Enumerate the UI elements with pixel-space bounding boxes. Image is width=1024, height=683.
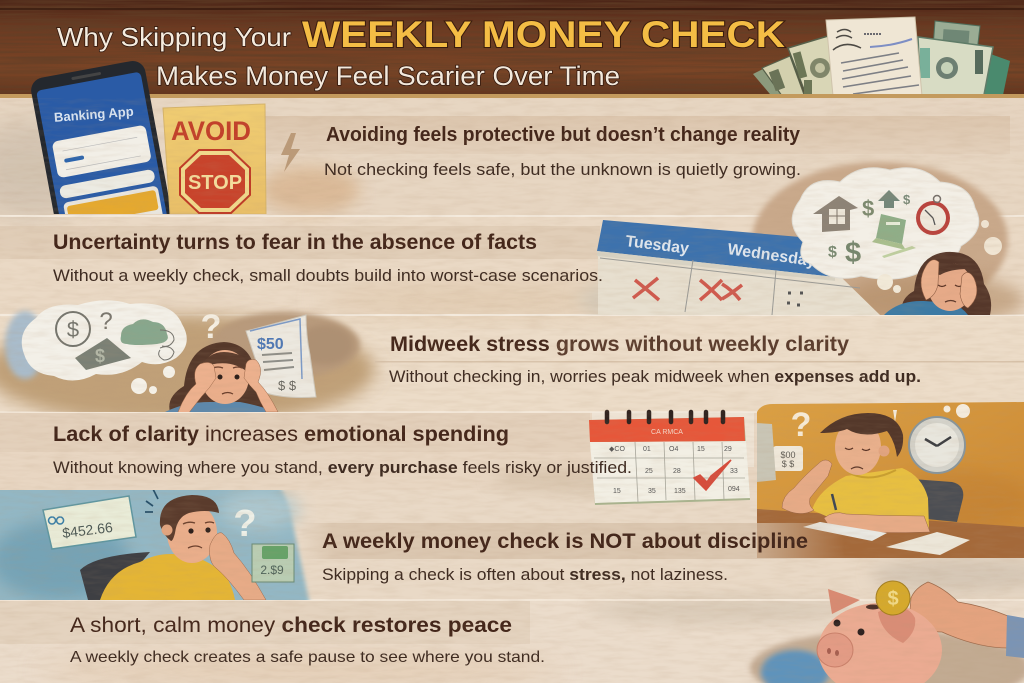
dollar coin: $ [67,317,79,342]
receipt: $50 [257,336,284,353]
pig ear right [878,607,915,643]
heading 6: A short, calm money check restores peace [70,614,512,637]
icon: dollar bills left [753,36,832,94]
receipt [246,315,316,398]
coin: $ [887,588,899,610]
panel 1: avoiding [265,116,1010,179]
illustration: tan backdrop [580,162,1024,326]
icon: alarm clock [916,196,950,235]
receipt: $ $ [278,378,297,393]
heading band [300,523,845,559]
title highlight: WEEKLY MONEY CHECK [302,14,785,55]
dollar coin [56,312,90,346]
calendar: 29 [724,446,732,453]
worry lines [145,489,158,512]
calendar: 28 [673,468,681,475]
calendar [589,412,776,505]
raised arm [210,533,266,600]
body 6: A weekly check creates a safe pause to see where you stand. [70,649,545,666]
red x marks [633,278,742,300]
calendar: 25 [645,468,653,475]
hand [910,582,1008,648]
thought cloud: $ [828,244,837,261]
illustration: calendar strip: Wednesday [726,241,817,270]
heading band [0,226,600,259]
wall clock [909,417,965,473]
calendar: 01 [643,446,651,453]
question mark: ? [791,406,811,444]
calendar: O4 [669,446,678,453]
action card [64,186,163,214]
panel 4: emotional spending [0,402,1024,558]
thought cloud [22,300,187,394]
day labels: Tuesday [625,233,690,258]
woman worried [165,342,278,414]
icon: house [813,196,858,232]
sticky price note [773,446,803,471]
coin [876,581,910,615]
calendar: ◆CO [609,446,625,453]
heading band divider [375,361,1024,362]
question mark: ? [233,503,257,545]
heading band [0,601,530,644]
body 4: Without knowing where you stand, every purchase feels risky or justified. [53,458,632,477]
chair [80,552,150,600]
chair [918,480,964,522]
illustration: orange wall [757,402,1024,558]
arm right [824,513,930,533]
header wood banner [0,0,1024,98]
search pill [59,169,156,199]
heading 1: Avoiding feels protective but doesn’t change reality [326,124,801,146]
icon: arrow up [878,190,900,208]
panel 5: not about discipline [0,490,836,600]
pig ear left [828,589,860,614]
man worried [100,495,266,600]
illustration: calendar strip [597,220,880,315]
sticky price note: $ $ [782,459,794,469]
thought cloud: $ [845,237,861,269]
calendar: 33 [730,468,738,475]
calendar: 35 [648,488,656,495]
dollar signs: $ [862,196,874,221]
piggy bank with coin [817,581,1024,683]
illustration: backdrop [0,311,375,425]
money pile [252,544,294,582]
icon: paper note [826,17,922,96]
question mark in cloud: ? [99,308,113,335]
illustration: blue wall [0,490,312,600]
icon: lightning bolt [281,133,300,172]
sleeve [1006,615,1024,658]
notebook and paper [803,522,887,541]
icon: stop sign: STOP [188,172,242,194]
illustration: avoid stop note [163,104,266,214]
man thinking [782,413,930,533]
heading band [0,413,590,452]
money stack [75,338,131,370]
panel 2: uncertainty [0,162,1024,326]
balance card [43,496,136,549]
icon: dollar bills right [918,21,1010,100]
panel 6: calm check [0,581,1024,683]
panel 3: midweek stress [0,300,1024,412]
title line 2: Makes Money Feel Scarier Over Time [156,61,620,91]
money pile: 2.$9 [260,563,284,577]
thought cloud: $ [903,192,911,207]
heading 5: A weekly money check is NOT about discipline [322,530,808,553]
illustration: backdrop stains [750,630,1024,683]
money stack: $ [95,346,105,366]
body 3: Without checking in, worries peak midweek when expenses add up. [389,367,921,386]
calendar: 094 [728,486,740,493]
calendar: CA RMCA [651,429,683,436]
calendar: 15 [613,488,621,495]
arm left [782,460,832,514]
body 1: Not checking feels safe, but the unknown is quietly growing. [324,160,801,179]
desk [757,509,1024,558]
heading 4: Lack of clarity increases emotional spending [53,423,509,446]
balance card: $452.66 [61,519,114,541]
snout [817,633,853,667]
app title: Banking App [53,104,134,125]
illustration: bills and note in header [753,17,1010,100]
illustration: phone with banking app [31,61,170,214]
pig body [818,603,942,683]
red check mark [694,460,731,490]
body 2: Without a weekly check, small doubts build into worst-case scenarios. [53,266,603,285]
sticky price note: $00 [780,450,796,460]
body 5: Skipping a check is often about stress, not laziness. [322,565,728,584]
question mark: ? [201,308,221,346]
login card [52,125,152,178]
woman worried [884,252,991,315]
calendar: 15 [697,446,705,453]
heading 2: Uncertainty turns to fear in the absence of facts [53,231,537,254]
title [57,14,785,91]
heading 3: Midweek stress grows without weekly clarity [390,333,849,356]
icon: laptop [872,214,906,250]
calendar: 135 [674,488,686,495]
heading band [265,116,1010,154]
title line 1: Why Skipping Your [57,22,291,52]
green cloud icon [121,319,168,345]
avoid label: AVOID [171,116,251,146]
thought cloud [792,168,1002,293]
